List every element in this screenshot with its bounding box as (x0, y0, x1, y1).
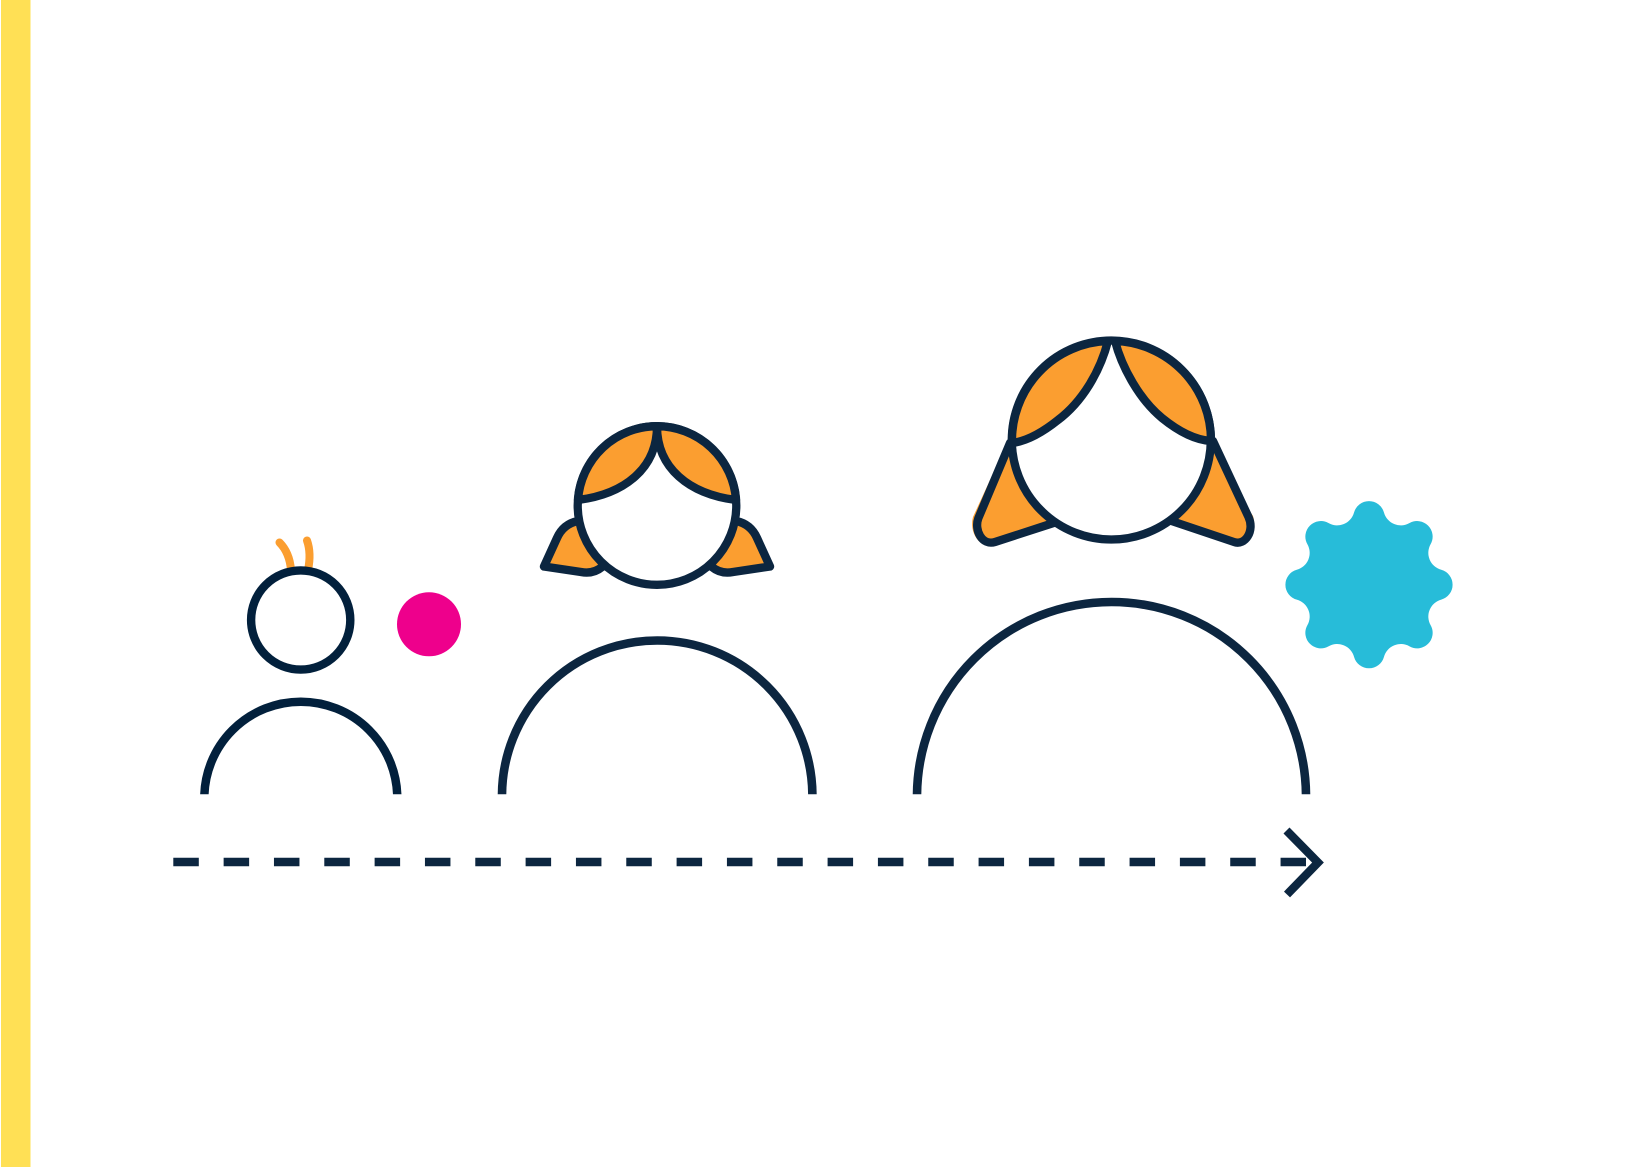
right hair orange backing (1215, 480, 1254, 545)
pink dot (397, 592, 461, 656)
dashed timeline arrow (173, 830, 1318, 894)
right fringe (657, 426, 736, 500)
left fringe (1012, 341, 1108, 443)
figure: large child (917, 340, 1306, 991)
left pigtail (544, 510, 620, 573)
head (251, 570, 350, 670)
shoulders (200, 698, 402, 794)
dashed line (173, 858, 1306, 866)
left hair (977, 440, 1090, 543)
hair tufts (280, 540, 310, 570)
yellow vertical bar (1, 0, 30, 1167)
left hair orange backing (972, 480, 1010, 545)
cyan scalloped badge (1285, 501, 1453, 668)
head (578, 426, 736, 585)
right pigtail (694, 510, 770, 573)
right hair (1135, 440, 1251, 543)
figure: small child (200, 536, 402, 794)
head (1012, 340, 1211, 540)
left fringe (578, 426, 657, 500)
shoulders (498, 636, 817, 794)
arrow head (1286, 830, 1318, 894)
right fringe (1115, 341, 1211, 441)
figure: medium child (498, 422, 817, 794)
shoulders (912, 598, 1310, 794)
